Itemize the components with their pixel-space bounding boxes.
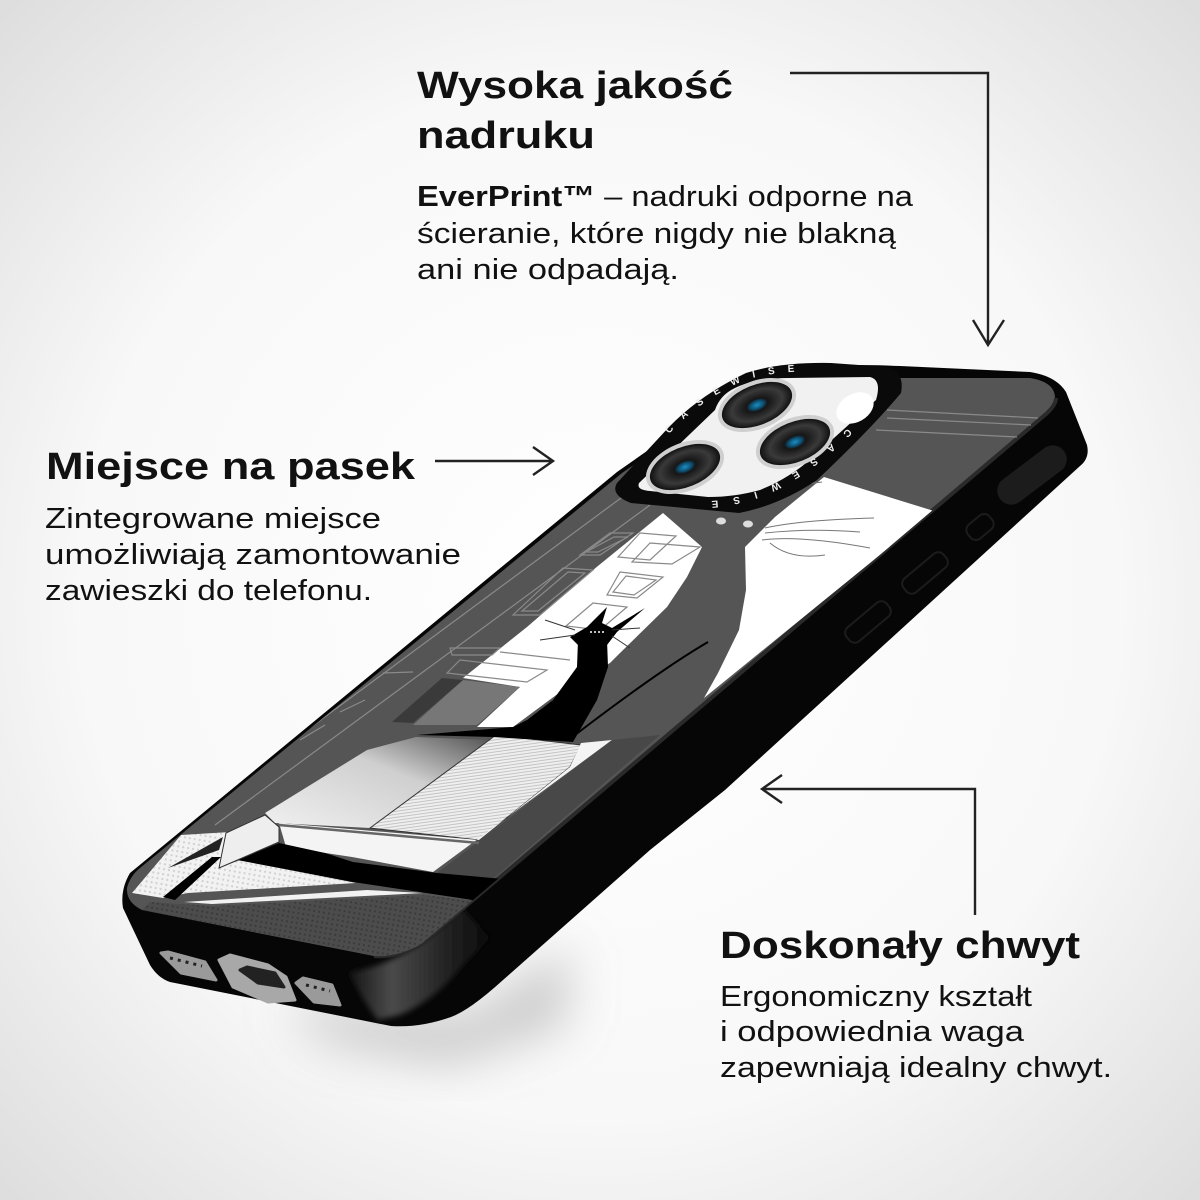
small dark wedge [168,837,223,868]
side buttons [842,511,997,646]
white floor [132,832,356,898]
case body [122,365,1088,1026]
black shadow band [237,843,514,902]
cat whiskers [540,620,640,648]
body text: umożliwiają zamontowanie [45,539,461,571]
bump ring [615,363,902,513]
black cat [417,607,708,742]
lens right [748,404,842,480]
body text: zapewniają idealny chwyt. [720,1052,1112,1084]
left speaker holes [170,958,202,966]
rear face [127,378,1055,956]
callout: grip [720,775,1112,1084]
side oval [992,440,1072,510]
callout: strap slot [45,446,553,607]
large cat whiskers [762,482,874,557]
cat eyes [590,631,604,633]
charging ports [161,952,340,1005]
arrow [435,447,553,475]
ring brand text reversed: CASEWISE [712,430,852,508]
corner highlight [349,908,490,1020]
pillow [219,815,279,868]
patterned grey area [437,735,660,890]
floor light strip [184,890,423,904]
left speaker [161,952,216,980]
heading: Wysoka jakość [417,65,733,107]
bed frame line [279,825,479,843]
face bevel [374,398,1056,956]
lens top [710,367,804,443]
right speaker holes [306,985,330,991]
body text: Zintegrowane miejsce [45,503,381,535]
body text: ani nie odpadają. [417,254,679,286]
textured dark floor [142,895,486,956]
shaded bed side [265,737,489,828]
heading: Doskonały chwyt [720,925,1080,967]
body text [417,181,914,286]
dark window edge [392,678,463,723]
body text: ścieranie, które nigdy nie blakną [417,218,897,250]
phone drop shadow [280,945,570,1065]
camera window [638,377,878,497]
body text [45,503,461,607]
body text: EverPrint™ – nadruki odporne na [417,181,914,213]
facade lines [165,410,1038,835]
body text: Ergonomiczny kształt [720,981,1032,1013]
thin tail line [575,642,708,735]
heading: nadruku [417,115,595,157]
white window strip [463,513,702,727]
body text [720,981,1112,1084]
callout: print quality [417,65,1004,345]
heading [417,65,733,157]
black diagonal stroke [163,857,221,900]
cat body and tail [417,640,608,742]
phone case [122,362,1088,1026]
white area upper right [704,477,934,698]
lenses [638,367,842,505]
white bedspread [279,740,612,872]
lens left [638,429,732,505]
flash [831,386,879,430]
USB port [219,955,295,1002]
right speaker [296,978,340,1005]
eyes of large cat [716,518,753,528]
cat head and ears [570,607,645,645]
body text: zawieszki do telefonu. [45,575,372,607]
arrow [790,73,1004,345]
ring brand text: CASEWISE [666,364,794,432]
artwork [132,410,1038,956]
medium grey window [413,680,520,725]
USB hole [240,967,284,987]
arrow [762,775,975,915]
camera bump [615,362,902,513]
bed top panel [370,735,581,840]
body text: i odpowiednia waga [720,1016,1025,1048]
heading: Miejsce na pasek [46,446,416,488]
